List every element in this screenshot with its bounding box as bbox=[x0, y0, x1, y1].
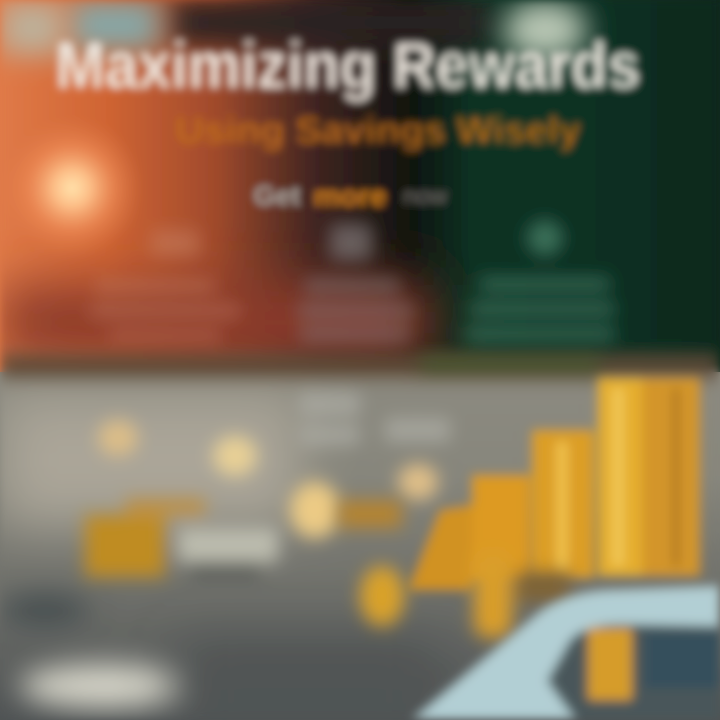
tagline: Get bbox=[254, 180, 300, 211]
background: upper colour wall bbox=[0, 0, 720, 375]
bar chart: coin stacks bbox=[85, 378, 700, 638]
panel: right column text bbox=[465, 220, 615, 340]
icon: glowing coins on floor bbox=[98, 420, 438, 538]
coin stack: far left bbox=[85, 498, 278, 577]
panel: centre column text bbox=[298, 224, 413, 340]
icon: pale blue car corner bbox=[412, 586, 720, 720]
panel: left column text bbox=[90, 230, 240, 340]
coin stack: middle low bbox=[338, 500, 402, 528]
title: Maximizing Rewards bbox=[56, 28, 640, 102]
subtitle: Using Savings Wisely bbox=[176, 110, 580, 152]
coin stack: rising bars bbox=[408, 378, 700, 590]
coin stack: front coins bbox=[360, 550, 570, 638]
icon: glowing sun bbox=[0, 116, 144, 260]
tagline: now bbox=[403, 183, 448, 210]
background: lower grey floor bbox=[0, 354, 720, 720]
tagline: more bbox=[313, 180, 387, 213]
tagline bbox=[254, 180, 448, 213]
panel: floor captions bbox=[300, 392, 450, 445]
